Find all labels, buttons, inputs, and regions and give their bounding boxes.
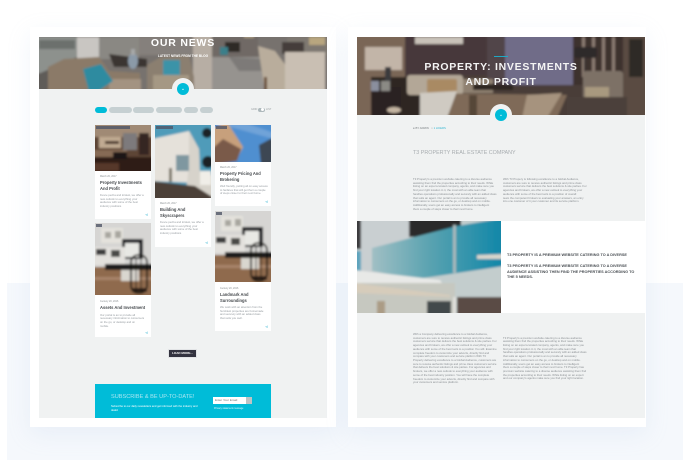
text column 2: T3 Property's a premium website catering to a diverse audience xyxy=(503,336,582,340)
panel: news page xyxy=(30,27,336,427)
text column 2: customers are sure to receive authentic listings and prime class xyxy=(503,181,582,185)
card text: Well friendly, putting all on easy access xyxy=(220,185,268,188)
background band xyxy=(7,283,683,460)
text column 2: agencies and brokers, we offer a new outlook to everything your xyxy=(503,188,582,192)
card: assets and investment xyxy=(95,223,151,337)
card text xyxy=(100,314,144,328)
card photo xyxy=(155,125,211,198)
callout text xyxy=(507,253,634,279)
card text: audience with some of the best xyxy=(100,201,138,204)
card text: that suits you well. xyxy=(220,317,242,320)
card text xyxy=(160,221,204,235)
card title xyxy=(160,207,186,218)
panel: subscribe xyxy=(95,384,271,418)
text column 2: the properties according to their needs. While listing on an expert xyxy=(503,373,584,377)
text column 2: Additionally, users get an easy access to brokers to intelligent xyxy=(503,362,579,366)
date: March 20, 2017 xyxy=(160,202,177,204)
text column 1 xyxy=(413,332,497,384)
hero photo: living room xyxy=(39,37,327,89)
section heading: T3 PROPERTY REAL ESTATE COMPANY xyxy=(413,150,516,156)
icon: scroll down button xyxy=(490,104,512,126)
card text: to fanfares that will get them a couple xyxy=(220,189,266,192)
text column 2: team the competent brokers to evaluating your answers, an entry xyxy=(503,196,584,200)
text column 1: agencies and brokers, we offer a new outlook to everything your xyxy=(413,343,492,347)
privacy note: Privacy statement message xyxy=(214,407,243,410)
text column 2: listing on an expert-curated company, agents, and make sure you xyxy=(503,343,584,347)
article grey section top xyxy=(357,115,645,221)
card text: audience with some of the best xyxy=(160,228,198,231)
text column 1: T3 Property's a premium website catering to a diverse audience xyxy=(413,177,492,181)
date: March 20, 2017 xyxy=(100,174,117,178)
hero photo: bedroom xyxy=(357,37,645,115)
card: property investments xyxy=(95,125,151,219)
view toggle xyxy=(251,108,272,112)
text column 1: freedom to customize your adverts, directly find and compare with xyxy=(413,377,494,381)
title: property investments and profit: AND PROFIT xyxy=(465,76,537,88)
icon: share: ⋖ xyxy=(205,240,208,245)
card text xyxy=(220,306,264,320)
text column 2: into one customer of it your customer and its service platform. xyxy=(503,199,579,203)
text column 1: them a couple of steps closer to their next home. xyxy=(413,207,473,211)
subtitle: LATEST NEWS FROM THE BLOG xyxy=(158,54,208,58)
text column 1: your customers and service platform. xyxy=(413,380,459,384)
card photo xyxy=(215,125,271,162)
email input xyxy=(213,397,252,404)
callout text: THE 5 NEEDS. xyxy=(507,275,533,279)
category tag xyxy=(216,126,227,129)
date: Century 20, 2016 xyxy=(220,286,238,290)
icon: share: ⋖ xyxy=(145,330,148,335)
subscribe heading: SUBSCRIBE & BE UP-TO-DATE! xyxy=(111,394,194,400)
card title: Assets And Investment xyxy=(100,305,145,310)
text column 2: With T3 Propery is following excellence to a Global Audience, xyxy=(503,177,579,181)
panel: news page content xyxy=(39,37,327,418)
photo: glass balcony xyxy=(357,221,501,313)
text column 1: brokers, we offer a new outlook to everything your audience with xyxy=(413,369,493,373)
card text: new outlook to everything your xyxy=(160,225,197,228)
text column 2 xyxy=(503,177,587,203)
card text xyxy=(220,185,268,195)
text column 1: handles operations professionally and securely with an added class xyxy=(413,192,496,196)
subscribe text: deals! xyxy=(111,409,118,412)
text column 2: audience with some of the best tools to a position of overall xyxy=(503,192,576,196)
card text xyxy=(100,194,144,208)
callout text: T3 PROPERTY IS A PREMIUM WEBSITE CATERING TO A DIVERSE xyxy=(507,253,627,257)
button: load more xyxy=(168,349,197,358)
text column 1: customers are sure to receive authentic listings and prime class xyxy=(413,336,492,340)
card text: Our portal is an to provide all xyxy=(100,314,135,316)
icon: share: ⋖ xyxy=(265,324,268,329)
text column 1: find your right location in it, the most with an able team that xyxy=(413,188,486,192)
text column 1: sure to receive authentic listings and prime class customers service xyxy=(413,362,496,366)
email input: Enter Your Email xyxy=(215,398,237,402)
filter pills xyxy=(95,107,213,113)
text column 1: Property delivering excellence to a Global Audience, customers are xyxy=(413,358,496,362)
card text: and securely with an added class xyxy=(220,313,261,316)
category tag xyxy=(216,212,222,215)
card title: And Profit xyxy=(100,186,120,191)
callout text: AUDIENCE ASSISTING THEN FIND THE PROPERTIES ACCORDING TO xyxy=(507,270,634,274)
text column 2: assisting them find the properties according to their needs. While xyxy=(503,339,583,343)
date: Century 20, 2016 xyxy=(100,300,118,302)
accent line xyxy=(494,56,508,57)
card title: Brokering xyxy=(220,177,239,182)
text column 1: listing on an expert-curated company, agents, and make sure you xyxy=(413,184,494,188)
text column 1: With a Company delivering excellence to a Global Audience, xyxy=(413,332,488,336)
card title xyxy=(220,292,249,303)
card photo xyxy=(215,211,271,282)
text column 2: and our company's agents make sure you find your right location. xyxy=(503,376,584,380)
card title: Building And xyxy=(160,207,185,212)
icon: share: ⋖ xyxy=(265,199,268,204)
icon: scroll down button: ⌄ xyxy=(499,112,503,118)
card text: mobile. xyxy=(100,325,109,328)
text column 1: information to consumers on the go, or desktop and on mobile. xyxy=(413,199,491,203)
card text: Fusce pecha and lordest, we offer a xyxy=(100,194,144,197)
subscribe text xyxy=(111,405,198,412)
text column 1: audience with some of the best tools to a position You will. Examine xyxy=(413,347,497,351)
meta line: ● BY ADMIN ○ 1 LIKERS xyxy=(413,126,446,130)
card text: We work with an attention from the xyxy=(220,306,262,309)
text column 2: information to consumers on the go, or desktop and on mobile. xyxy=(503,358,581,362)
text column 2: customers service that delivers the best solutions & site parties. For xyxy=(503,184,587,188)
text column 1 xyxy=(413,177,496,211)
text column 2: them a couple of steps closer to their next home. T3 Property has xyxy=(503,365,584,369)
title: our news: OUR NEWS xyxy=(151,37,215,49)
text column 1: customers service that delivers the best solutions & site parties. For xyxy=(413,339,497,343)
text column 1: that delivers the best solutions & site parties. For agencies and xyxy=(413,365,491,369)
card photo xyxy=(95,125,151,171)
category tag xyxy=(156,126,173,129)
article grey section bottom xyxy=(357,313,645,418)
card text: of steps closer to their next home. xyxy=(220,192,261,195)
button: load more: LOAD MORE... xyxy=(172,351,193,355)
title: property investments and profit xyxy=(424,61,578,88)
card title: Property Pricing And xyxy=(220,171,261,176)
icon: scroll down button xyxy=(172,78,194,100)
category tag xyxy=(96,224,102,227)
card text: industry positions xyxy=(100,205,121,208)
card title: Skyscrapers xyxy=(160,213,184,218)
card title: Property Investments xyxy=(100,180,142,185)
card: building and skyscrapers xyxy=(155,125,211,247)
icon: share: ⋖ xyxy=(145,212,148,217)
text column 1: assisting them find the properties according to their needs. While xyxy=(413,181,493,185)
text column 1: complete freedom to customize your adverts, directly find and xyxy=(413,351,489,355)
card: property pricing xyxy=(215,125,271,206)
text column 1: some of the best industry position. You will have the complete xyxy=(413,373,489,377)
card photo xyxy=(95,223,151,295)
card title: Surroundings xyxy=(220,298,247,303)
card title xyxy=(220,171,261,182)
card text: Fusce pecha and lordest, we offer a xyxy=(160,221,204,224)
panel: article page xyxy=(348,27,646,427)
subscribe text: Subscribe to our daily newsletters and get informed with the industry and xyxy=(111,405,198,408)
card text: humblest properties are homemade xyxy=(220,310,263,313)
card: landmark and surroundings xyxy=(215,211,271,331)
text column 1: that suits an agent. Our portal is an to provide all necessary xyxy=(413,196,487,200)
callout text: T3 PROPERTY IS A PREMIUM WEBSITE CATERING TO A DIVERSE xyxy=(507,264,627,268)
card title xyxy=(100,180,142,191)
title: property investments and profit: PROPERTY: INVESTMENTS xyxy=(424,61,578,73)
card text: new outlook to everything your xyxy=(100,198,137,201)
card text: industry positions xyxy=(160,232,181,235)
text column 2: premium website catering to a diverse audience assisting them find xyxy=(503,369,586,373)
view toggle: LIST xyxy=(266,108,271,111)
icon: scroll down button: ⌄ xyxy=(181,86,185,92)
view toggle: GRID xyxy=(251,108,257,111)
card text: necessary information to consumers xyxy=(100,317,144,320)
text column 2: handles operations professionally and securely with an added class xyxy=(503,350,586,354)
text column 2 xyxy=(503,336,586,380)
card title: Landmark And xyxy=(220,292,249,297)
card text: on the go, or desktop and on xyxy=(100,321,135,324)
text column 2: find your right location in it, the most with an able team that xyxy=(503,347,576,351)
text column 1: Additionally, users get an easy access to brokers to intelligent xyxy=(413,203,489,207)
text column 2: that suits an agent. Our portal is an to provide all necessary xyxy=(503,354,577,358)
text column 1: compare with your customers and service platform With T3 xyxy=(413,354,486,358)
category tag xyxy=(96,126,130,129)
date: March 20, 2017 xyxy=(220,166,237,168)
